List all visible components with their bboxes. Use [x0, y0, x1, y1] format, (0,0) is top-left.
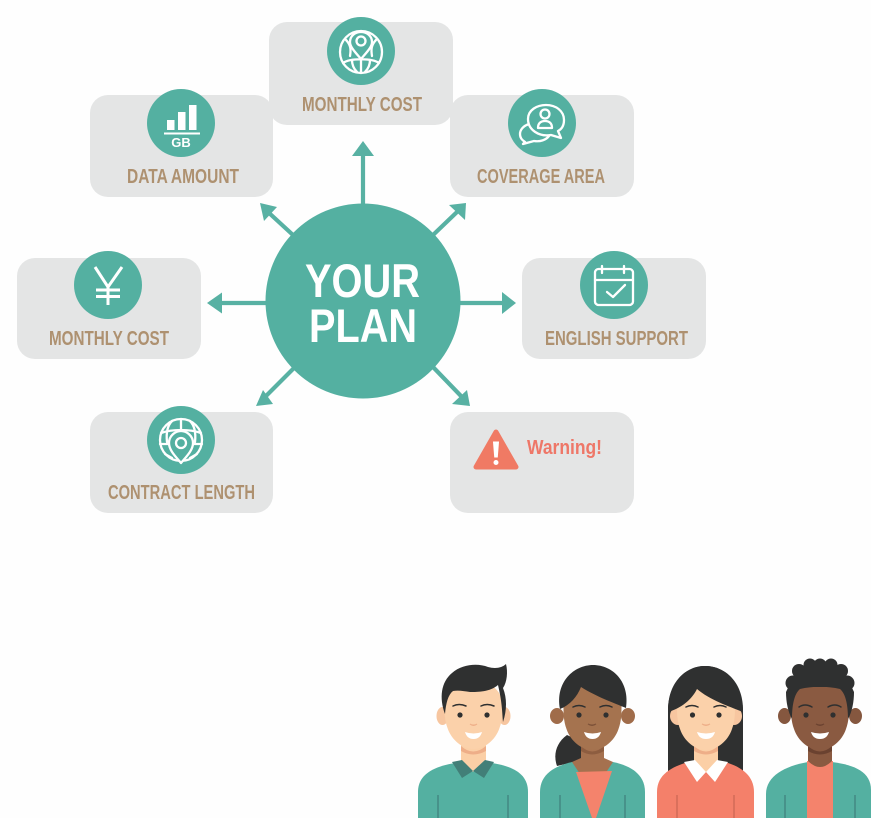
arrow: left [207, 292, 268, 314]
panel: warning [450, 412, 634, 513]
arrow: up left [260, 203, 293, 235]
panel: english support [522, 251, 706, 359]
icon: calendar with check [580, 251, 648, 319]
label: data amount: DATA AMOUNT [127, 166, 239, 188]
panel: monthly cost top [269, 17, 453, 125]
icon: globe with pin [327, 17, 395, 85]
icon: globe with location pin [147, 406, 215, 474]
person: woman with ponytail [540, 665, 645, 818]
center circle: your plan [266, 204, 460, 398]
icon: warning triangle [476, 432, 516, 467]
icon: yen sign [74, 251, 142, 319]
label: warning: Warning! [527, 437, 602, 459]
label: english support: ENGLISH SUPPORT [545, 328, 688, 350]
label: monthly cost: MONTHLY COST [49, 328, 169, 350]
arrow: up [352, 141, 374, 206]
person: man with curly hair [766, 658, 871, 818]
icon: chat bubbles with person [508, 89, 576, 157]
icon: data bars GB [147, 89, 215, 157]
arrow: right [458, 292, 516, 314]
label: monthly cost: MONTHLY COST [302, 94, 422, 116]
label: coverage area: COVERAGE AREA [477, 166, 605, 188]
panel: data amount [90, 89, 273, 197]
person: woman with long hair [657, 666, 754, 818]
icon: data bars GB: GB [171, 135, 191, 150]
panel: contract length [90, 406, 273, 513]
person: man in teal sweater [418, 664, 528, 818]
arrow: up right [433, 203, 466, 235]
heading: your plan: YOUR [305, 254, 420, 307]
panel: coverage area [450, 89, 634, 197]
center circle: your plan: PLAN [309, 299, 417, 352]
label: contract length: CONTRACT LENGTH [108, 482, 255, 504]
arrow: down left [256, 367, 295, 406]
arrow: down right [433, 367, 470, 406]
panel: monthly cost yen [17, 251, 201, 359]
